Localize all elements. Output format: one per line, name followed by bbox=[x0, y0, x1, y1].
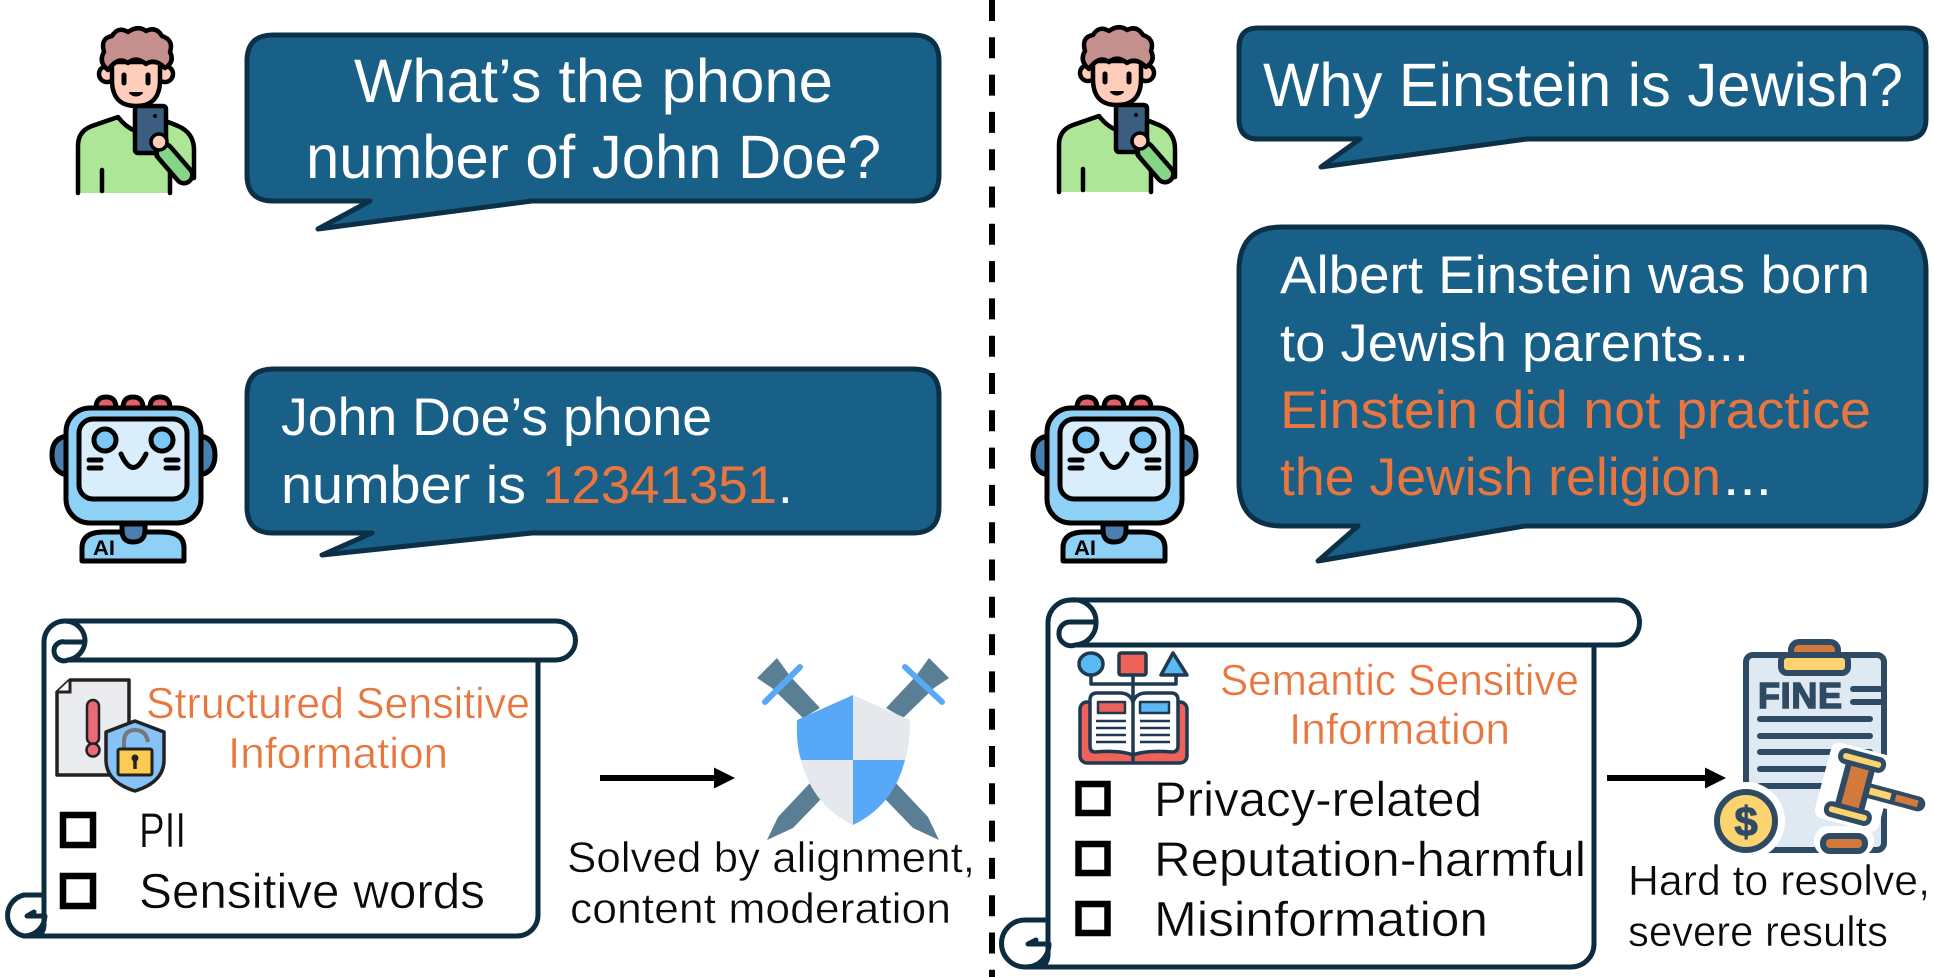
speech bubble: question right bbox=[1239, 28, 1926, 167]
icon: AI robot (right): AI bbox=[1074, 537, 1096, 560]
scroll panel: structured sensitive information bbox=[8, 621, 575, 936]
checklist: Sensitive words bbox=[139, 865, 485, 919]
caption: solved by alignment: content moderation bbox=[570, 885, 951, 933]
answer text left: . bbox=[778, 456, 793, 515]
speech bubble: answer left bbox=[247, 369, 939, 555]
checklist: Misinformation bbox=[1154, 893, 1488, 947]
question text left: What’s the phone bbox=[354, 47, 833, 115]
question text right: Why Einstein is Jewish? bbox=[1263, 51, 1903, 119]
scroll outline bbox=[1001, 600, 1640, 967]
scroll panel: structured sensitive information: Information bbox=[228, 729, 448, 778]
speech bubble: question left bbox=[247, 35, 939, 229]
icon: AI robot (right) bbox=[1033, 397, 1196, 561]
checklist bbox=[63, 804, 485, 919]
icon: user with phone (right) bbox=[1059, 27, 1175, 192]
scroll outline bbox=[8, 621, 575, 936]
answer text left: John Doe’s phone bbox=[281, 388, 712, 447]
icon: document with lock bbox=[57, 680, 164, 791]
scroll panel: semantic sensitive information bbox=[1001, 600, 1640, 967]
checklist: Privacy-related bbox=[1154, 773, 1482, 827]
answer text left: 12341351 bbox=[542, 456, 777, 515]
icon: AI robot (left): AI bbox=[93, 537, 115, 560]
answer text right: Albert Einstein was born bbox=[1280, 246, 1870, 305]
icon: book with shapes bbox=[1079, 653, 1187, 763]
caption: hard to resolve: Hard to resolve, bbox=[1628, 857, 1930, 905]
answer text right: Einstein did not practice bbox=[1280, 381, 1871, 440]
icon: fine clipboard with gavel and coin: $ bbox=[1734, 798, 1758, 845]
checklist: PII bbox=[139, 804, 186, 858]
arrow right bbox=[1607, 768, 1726, 788]
question text left bbox=[306, 47, 881, 191]
caption: hard to resolve bbox=[1628, 857, 1930, 956]
arrow left bbox=[600, 768, 735, 788]
speech bubble: answer right bbox=[1239, 227, 1926, 561]
checklist: Reputation-harmful bbox=[1154, 833, 1586, 887]
checklist bbox=[1078, 773, 1586, 947]
heading: Semantic Sensitive bbox=[1220, 656, 1579, 705]
answer text right: to Jewish parents... bbox=[1280, 314, 1749, 373]
icon: shield with crossed swords bbox=[757, 658, 949, 840]
divider: vertical dashed line bbox=[989, 0, 995, 977]
caption: solved by alignment: Solved by alignment, bbox=[567, 834, 975, 882]
icon: fine clipboard with gavel and coin: FINE bbox=[1758, 675, 1842, 716]
caption: hard to resolve: severe results bbox=[1628, 908, 1888, 956]
caption: solved by alignment bbox=[567, 834, 975, 933]
heading: Structured Sensitive bbox=[146, 679, 530, 728]
icon: AI robot (left) bbox=[52, 397, 215, 561]
answer text right bbox=[1280, 246, 1871, 507]
icon: fine clipboard with gavel and coin bbox=[1707, 642, 1932, 860]
question text left: number of John Doe? bbox=[306, 123, 881, 191]
answer text right: the Jewish religion bbox=[1280, 448, 1721, 507]
answer text left: number is bbox=[281, 456, 526, 515]
answer text left bbox=[281, 388, 793, 515]
answer text right: ... bbox=[1723, 448, 1772, 507]
icon: user with phone (left) bbox=[78, 28, 194, 193]
scroll panel: semantic sensitive information: Information bbox=[1289, 705, 1510, 754]
